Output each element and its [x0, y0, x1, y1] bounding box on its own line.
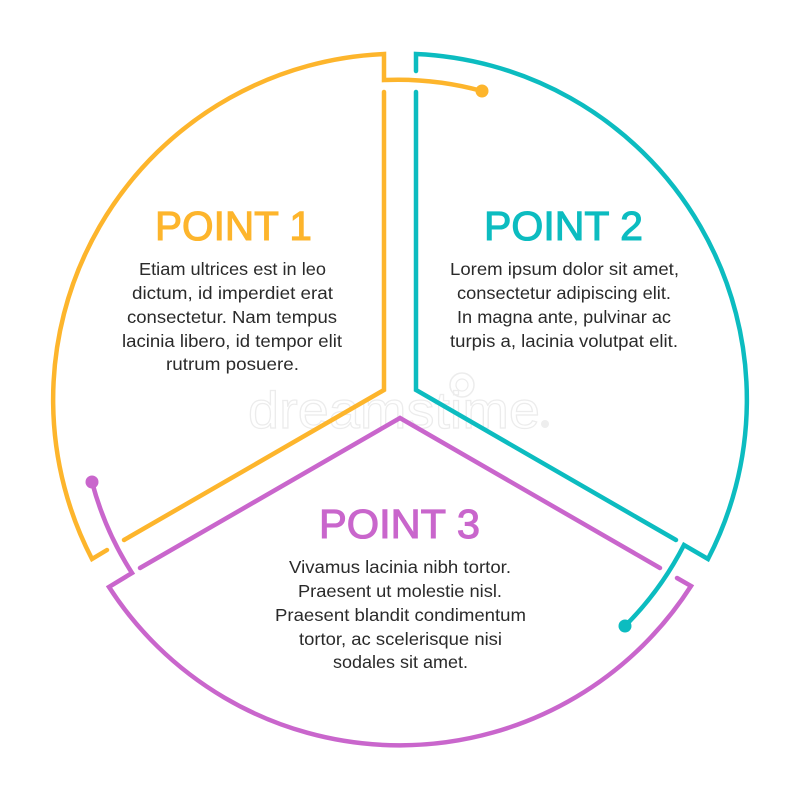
text block: point 1: consectetur. Nam tempus — [127, 307, 337, 327]
panel: point 1 outline — [53, 54, 489, 559]
text block: point 2: turpis a, lacinia volutpat elit. — [450, 331, 678, 351]
text block: point 2: In magna ante, pulvinar ac — [457, 307, 671, 327]
inner wedge teal — [416, 92, 676, 540]
outer arc purple — [92, 482, 691, 745]
text block: point 1: Etiam ultrices est in leo — [139, 259, 326, 279]
panel: point 3 outline — [86, 418, 691, 745]
outer arc teal — [416, 54, 747, 626]
panel: point 2 outline — [416, 54, 747, 632]
text block: point 2: consectetur adipiscing elit. — [457, 283, 671, 303]
text block: point 3: Praesent ut molestie nisl. — [298, 581, 502, 601]
dot purple — [86, 476, 98, 488]
watermark: dreamstime — [248, 382, 540, 440]
heading: point 3: POINT 3 — [319, 501, 480, 547]
heading: point 2: POINT 2 — [484, 203, 643, 249]
text block: point 3: sodales sit amet. — [333, 652, 468, 672]
text block: point 3: tortor, ac scelerisque nisi — [299, 629, 502, 649]
text block: point 2: Lorem ipsum dolor sit amet, — [450, 259, 679, 279]
text block: point 1: dictum, id imperdiet erat — [132, 283, 333, 303]
dot orange — [476, 84, 488, 98]
text block: point 1: rutrum posuere. — [166, 354, 299, 374]
text block: point 1: lacinia libero, id tempor elit — [122, 331, 342, 351]
text block: point 1 — [122, 259, 342, 374]
text block: point 3: Praesent blandit condimentum — [275, 605, 526, 625]
inner wedge purple — [140, 418, 660, 568]
heading: point 1: POINT 1 — [155, 203, 312, 249]
text block: point 3 — [275, 557, 526, 672]
text block: point 3: Vivamus lacinia nibh tortor. — [289, 557, 511, 577]
dot teal — [618, 620, 632, 632]
inner wedge orange — [124, 92, 384, 540]
outer arc orange — [53, 54, 482, 559]
text block: point 2 — [450, 259, 679, 351]
